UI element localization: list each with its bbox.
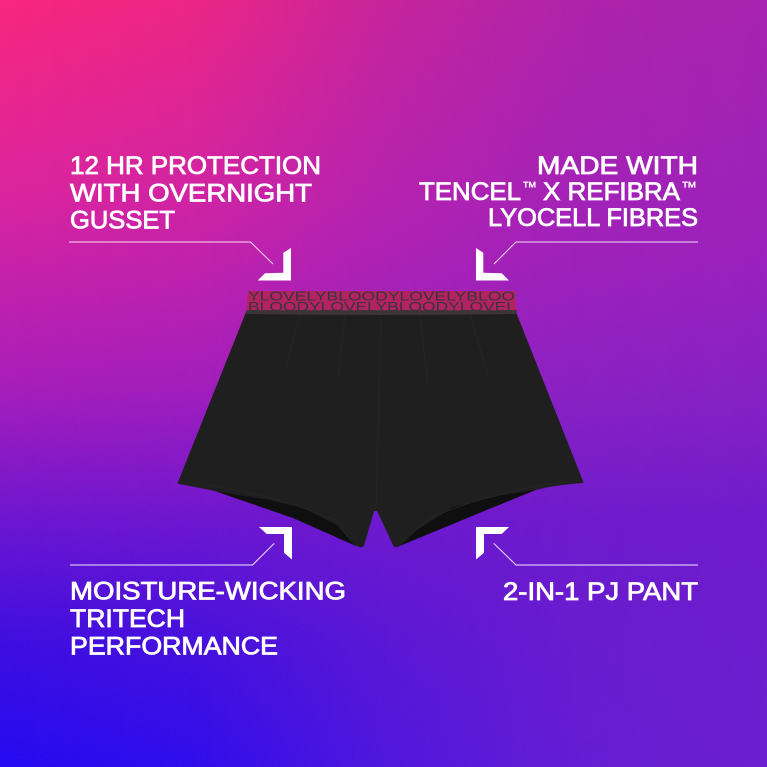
text: made with tencel x refibra (419, 152, 698, 232)
text: 12 hr protection: 12 HR PROTECTION (70, 152, 321, 180)
text: 12 hr protection (70, 152, 321, 234)
text: made with tencel x refibra: MADE WITH (537, 152, 698, 180)
fabric folds (180, 314, 581, 540)
leader line: bottom right (494, 543, 698, 565)
shorts body (178, 312, 583, 547)
text: moisture-wicking tritech performance: MOISTURE-WICKING (70, 578, 346, 606)
arrow: top left (258, 248, 291, 280)
text: moisture-wicking tritech performance: PERFORMANCE (70, 632, 278, 660)
text: 12 hr protection: WITH OVERNIGHT (70, 180, 312, 208)
waistband (246, 288, 517, 315)
arrow: bottom right (476, 527, 509, 560)
arrow: top right (476, 248, 509, 280)
arrow: bottom left (259, 527, 292, 560)
leader line: top left (69, 242, 273, 264)
text: made with tencel x refibra: X REFIBRA (543, 178, 680, 206)
right leg lining (397, 488, 547, 547)
shorts (178, 288, 583, 547)
waistband text row 2: BLOODYLOVELYBLOODYLOVEL (248, 299, 516, 314)
left leg lining (208, 490, 356, 546)
text: moisture-wicking tritech performance: TRITECH (70, 605, 185, 633)
leader line: bottom left (70, 543, 274, 565)
text: 2-in-1 pj pant: 2-IN-1 PJ PANT (503, 578, 698, 606)
text: made with tencel x refibra: ™ (522, 179, 537, 196)
waistband text row 1: YLOVELYBLOODYLOVELYBLOO (248, 288, 515, 304)
text: made with tencel x refibra: TENCEL (419, 178, 521, 206)
text: 12 hr protection: GUSSET (70, 206, 175, 234)
text: moisture-wicking tritech performance (70, 578, 346, 660)
leader line: top right (494, 242, 698, 264)
text: made with tencel x refibra: LYOCELL FIBRES (488, 204, 698, 232)
text: made with tencel x refibra: ™ (681, 179, 697, 196)
